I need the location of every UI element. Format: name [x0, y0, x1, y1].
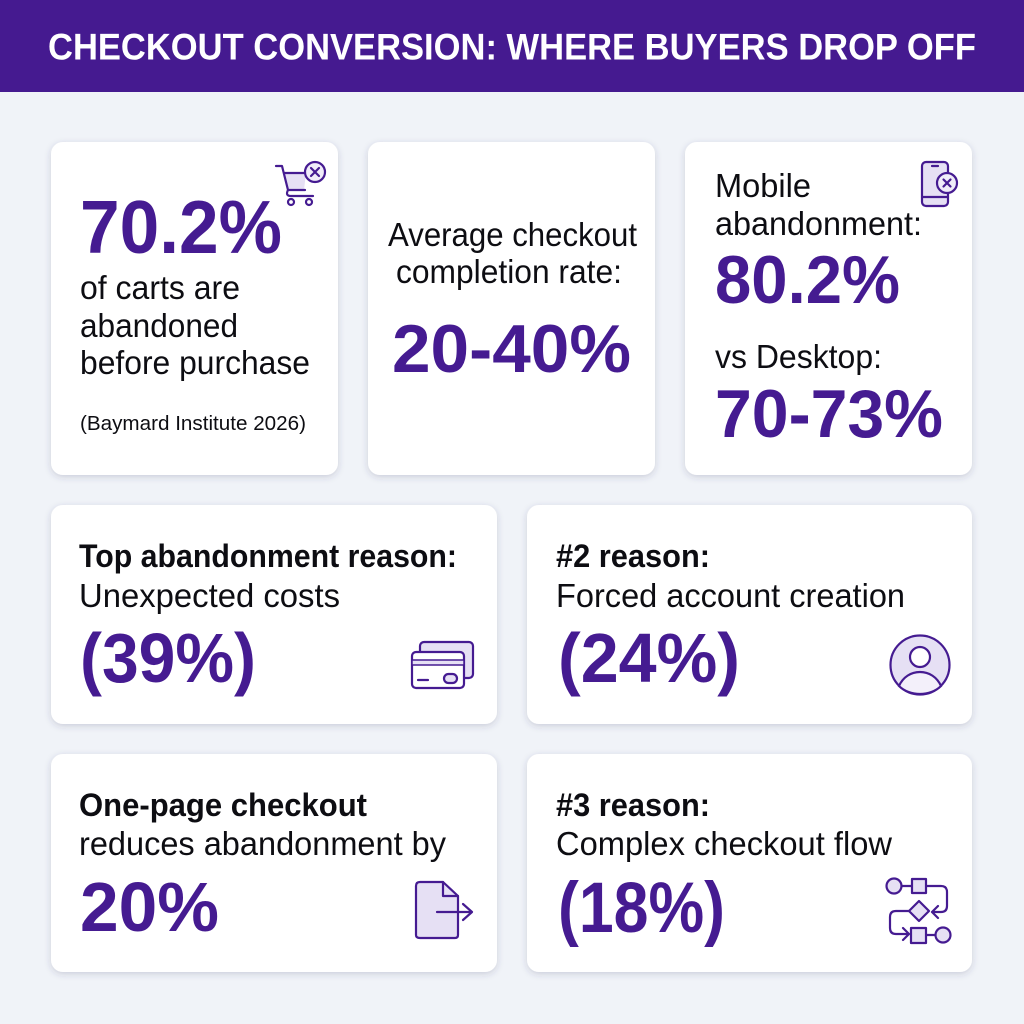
heading: #2 reason: [556, 538, 710, 574]
panel: completion rate [368, 142, 655, 475]
icon: flowchart [886, 878, 950, 943]
statistic 80.2%: 80.2% [715, 242, 900, 318]
description [388, 217, 638, 291]
reason: Complex checkout flow [556, 826, 893, 863]
description: Average checkout [388, 217, 638, 254]
reason: Unexpected costs [79, 578, 340, 615]
statistic 70.2%: 70.2% [80, 185, 282, 269]
source: (Baymard Institute 2026) [80, 412, 306, 435]
description: completion rate: [396, 254, 622, 291]
icon: user avatar [890, 636, 950, 694]
mobile label [715, 168, 922, 243]
description: of carts are [80, 270, 240, 307]
heading: #3 reason: [556, 787, 710, 823]
header banner [0, 0, 1024, 92]
statistic 20-40%: 20-40% [392, 311, 631, 387]
mobile label: Mobile [715, 168, 811, 205]
description [80, 270, 310, 382]
statistic 20%: 20% [80, 868, 219, 946]
panel: carts abandoned [51, 142, 338, 475]
panel: one-page checkout [51, 754, 497, 972]
heading: One-page checkout [79, 787, 367, 823]
statistic 18%: (18%) [558, 869, 725, 948]
reason: Forced account creation [556, 578, 905, 615]
title: CHECKOUT CONVERSION: WHERE BUYERS DROP OFF [48, 26, 976, 68]
panel: top reason [51, 505, 497, 724]
panel: second reason [527, 505, 972, 724]
icon: cart with x [276, 162, 325, 205]
panel: third reason [527, 754, 972, 972]
icon: credit cards [412, 642, 473, 688]
desktop label: vs Desktop: [715, 339, 882, 376]
statistic 70-73%: 70-73% [715, 376, 943, 452]
statistic 24%: (24%) [558, 619, 740, 697]
description: reduces abandonment by [79, 826, 446, 863]
icon: document with arrow [416, 882, 472, 938]
statistic 39%: (39%) [80, 619, 256, 697]
description: abandoned [80, 308, 238, 345]
panel: mobile vs desktop [685, 142, 972, 475]
icon: phone with x [922, 162, 957, 206]
mobile label: abandonment: [715, 206, 922, 243]
heading: Top abandonment reason: [79, 538, 457, 574]
description: before purchase [80, 345, 310, 382]
